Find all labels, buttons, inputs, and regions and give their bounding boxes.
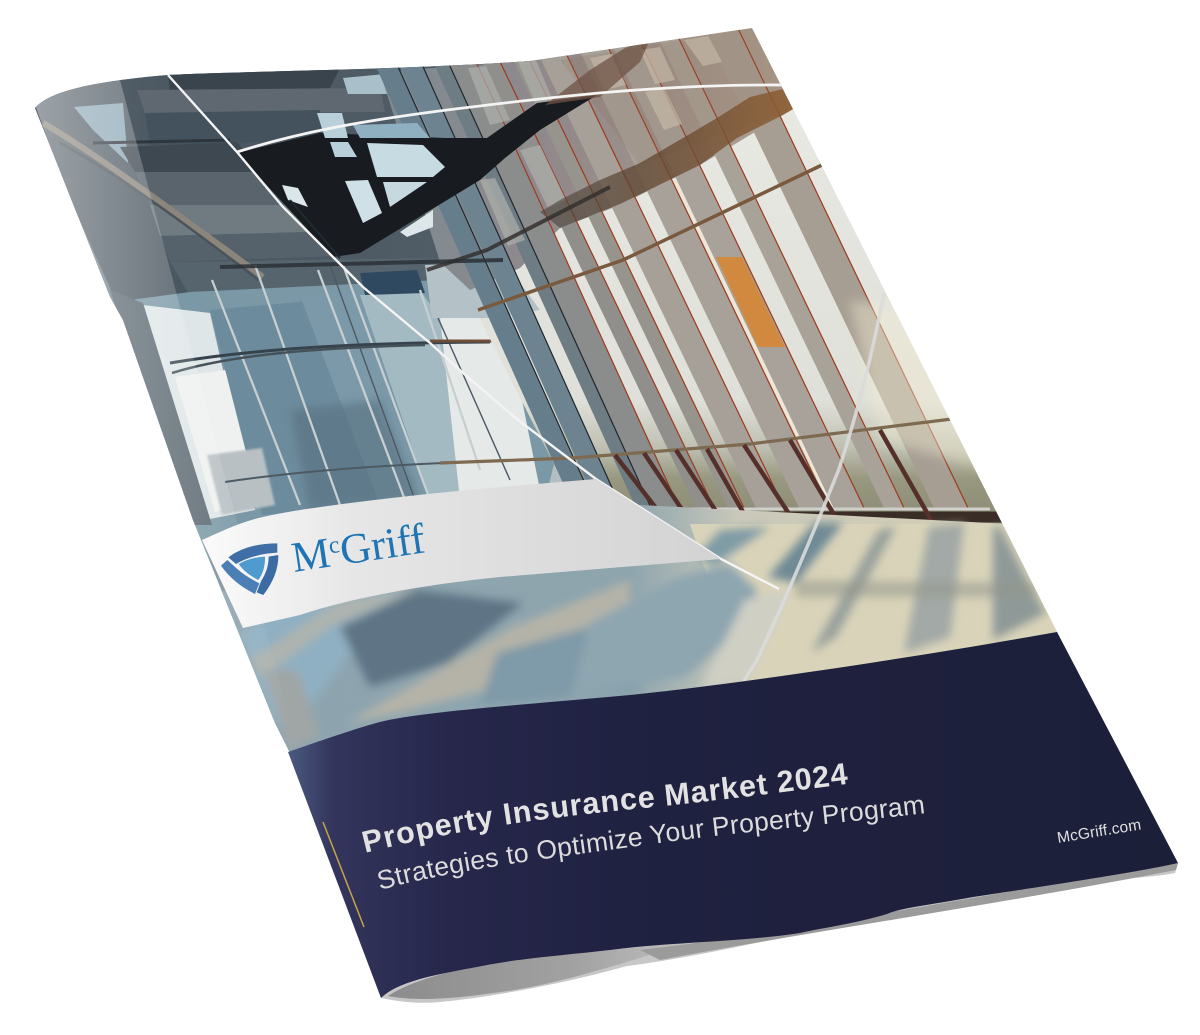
curved roof beam <box>43 123 263 277</box>
cream strip <box>675 180 833 510</box>
window texture <box>590 36 722 130</box>
page stack: grey inner pages <box>381 863 1178 1003</box>
logo: wordmark: Griff <box>337 515 429 575</box>
warm top tint <box>560 28 795 165</box>
title: Property Insurance Market 2024 <box>362 763 848 852</box>
navy title block <box>288 632 1178 998</box>
mullions and handrails <box>170 265 530 505</box>
slats <box>377 68 583 482</box>
gold rule <box>323 822 364 927</box>
floor <box>222 505 1058 752</box>
white curved lines <box>168 75 884 690</box>
cover photograph <box>30 20 1080 800</box>
spine highlight <box>36 80 249 656</box>
lit windows <box>282 113 445 237</box>
subtitle: Strategies to Optimize Your Property Program <box>378 800 924 888</box>
website: McGriff.com <box>1058 822 1141 843</box>
warm haze on lower right <box>850 300 990 470</box>
logo: wordmark: M <box>289 530 333 582</box>
right slatted facade <box>377 28 1026 570</box>
upper patterned windows <box>380 28 795 290</box>
brown handrails <box>440 165 1002 525</box>
brown band behind handrail <box>427 88 795 270</box>
photo base <box>30 20 1070 800</box>
logo: wordmark: c <box>327 532 341 559</box>
logo: shield <box>221 543 278 595</box>
white glazing <box>480 110 1026 570</box>
white logo band <box>202 479 721 628</box>
mullion lines <box>457 20 969 510</box>
black staircase <box>220 40 650 267</box>
glass curtain wall <box>110 270 560 560</box>
upper left dark interior <box>30 55 540 310</box>
